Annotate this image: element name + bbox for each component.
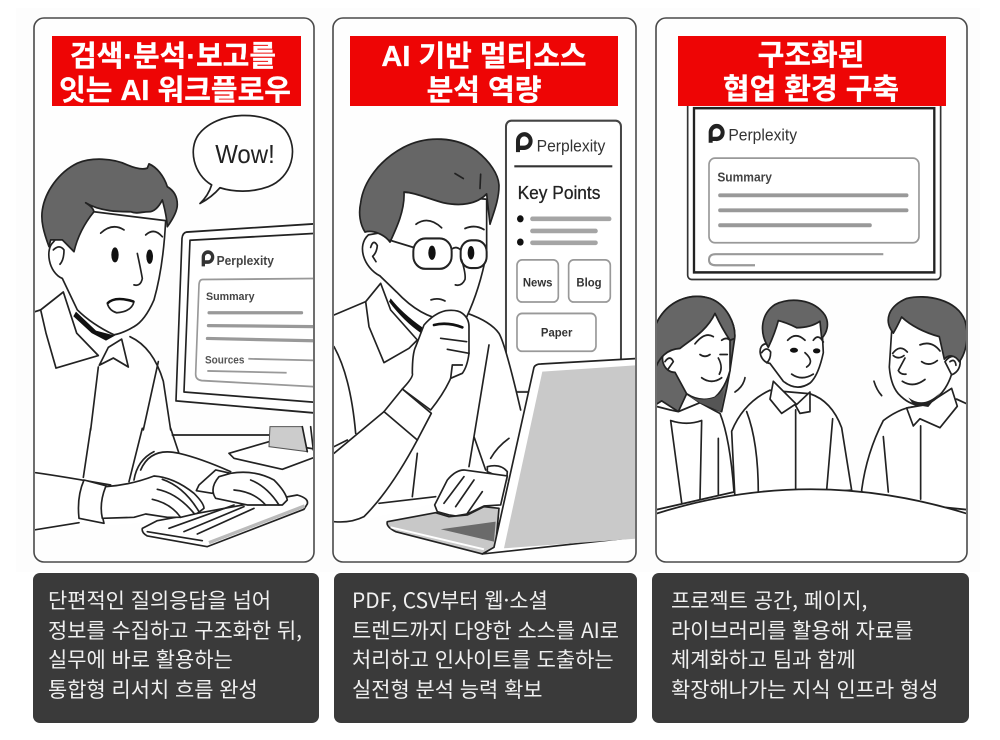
hands and laptop: [384, 310, 641, 554]
title 2: AI 기반 멀티소스: [381, 40, 587, 73]
title 2: 분석 역량: [427, 74, 541, 107]
title 3: [678, 36, 946, 106]
title 1: 잇는 AI 워크플로우: [59, 74, 291, 107]
man with glasses: body: [334, 283, 521, 522]
logo: Perplexity: [203, 252, 213, 266]
desktop monitor: [176, 223, 320, 413]
man at desktop: [35, 158, 178, 431]
caption 1: 단편적인 질의응답을 넘어 정보를 수집하고 구조화한 뒤, 실무에 바로 활용하는 통합형 리서치 흐름 완성: [48, 585, 302, 704]
desktop monitor: Sources: [205, 355, 245, 367]
speech bubble: Wow: Wow!: [215, 140, 275, 169]
sidebar: Key Points: Key Points: [518, 183, 600, 203]
caption 2: [334, 573, 637, 723]
sidebar: Key Points: Blog: [576, 276, 602, 290]
illustration canvas: [33, 17, 968, 563]
logo: Perplexity: [711, 126, 723, 143]
caption 2: PDF, CSV부터 웹·소셜 트렌드까지 다양한 소스를 AI로 처리하고 인사이트를 도출하는 실전형 분석 능력 확보: [352, 585, 619, 704]
title 3: 구조화된: [758, 39, 864, 72]
speech bubble: Wow: [193, 115, 293, 203]
desktop monitor: Summary: [206, 291, 255, 303]
panel: collaboration: [652, 18, 972, 567]
caption 3: 프로젝트 공간, 페이지, 라이브러리를 활용해 자료를 체계화하고 팀과 함께 확장해나가는 지식 인프라 형성: [671, 585, 938, 704]
title 2: [350, 36, 618, 107]
wall screen: Perplexity: [728, 126, 798, 145]
sidebar: Key Points: News: [523, 276, 553, 290]
wall screen: [686, 106, 942, 280]
woman: [656, 296, 745, 510]
panel: search analysis workflow: [34, 18, 321, 562]
keyboard and hands: [34, 427, 321, 547]
sidebar: Key Points: [506, 121, 621, 392]
title 1: [52, 36, 301, 107]
table: [652, 489, 972, 567]
man center: [732, 300, 852, 499]
man with glasses: head: [360, 139, 499, 321]
wall screen: Summary: [717, 170, 772, 184]
sidebar: Key Points: Perplexity: [537, 137, 606, 156]
desktop monitor: Perplexity: [217, 254, 274, 268]
logo: Perplexity: [518, 134, 531, 152]
caption 3: [652, 573, 969, 723]
title 3: 협업 환경 구축: [723, 73, 899, 106]
panel: multi-source analysis: [333, 18, 641, 562]
man right: [862, 297, 968, 510]
sidebar: Key Points: Paper: [541, 326, 573, 340]
title 1: 검색·분석·보고를: [70, 40, 276, 73]
